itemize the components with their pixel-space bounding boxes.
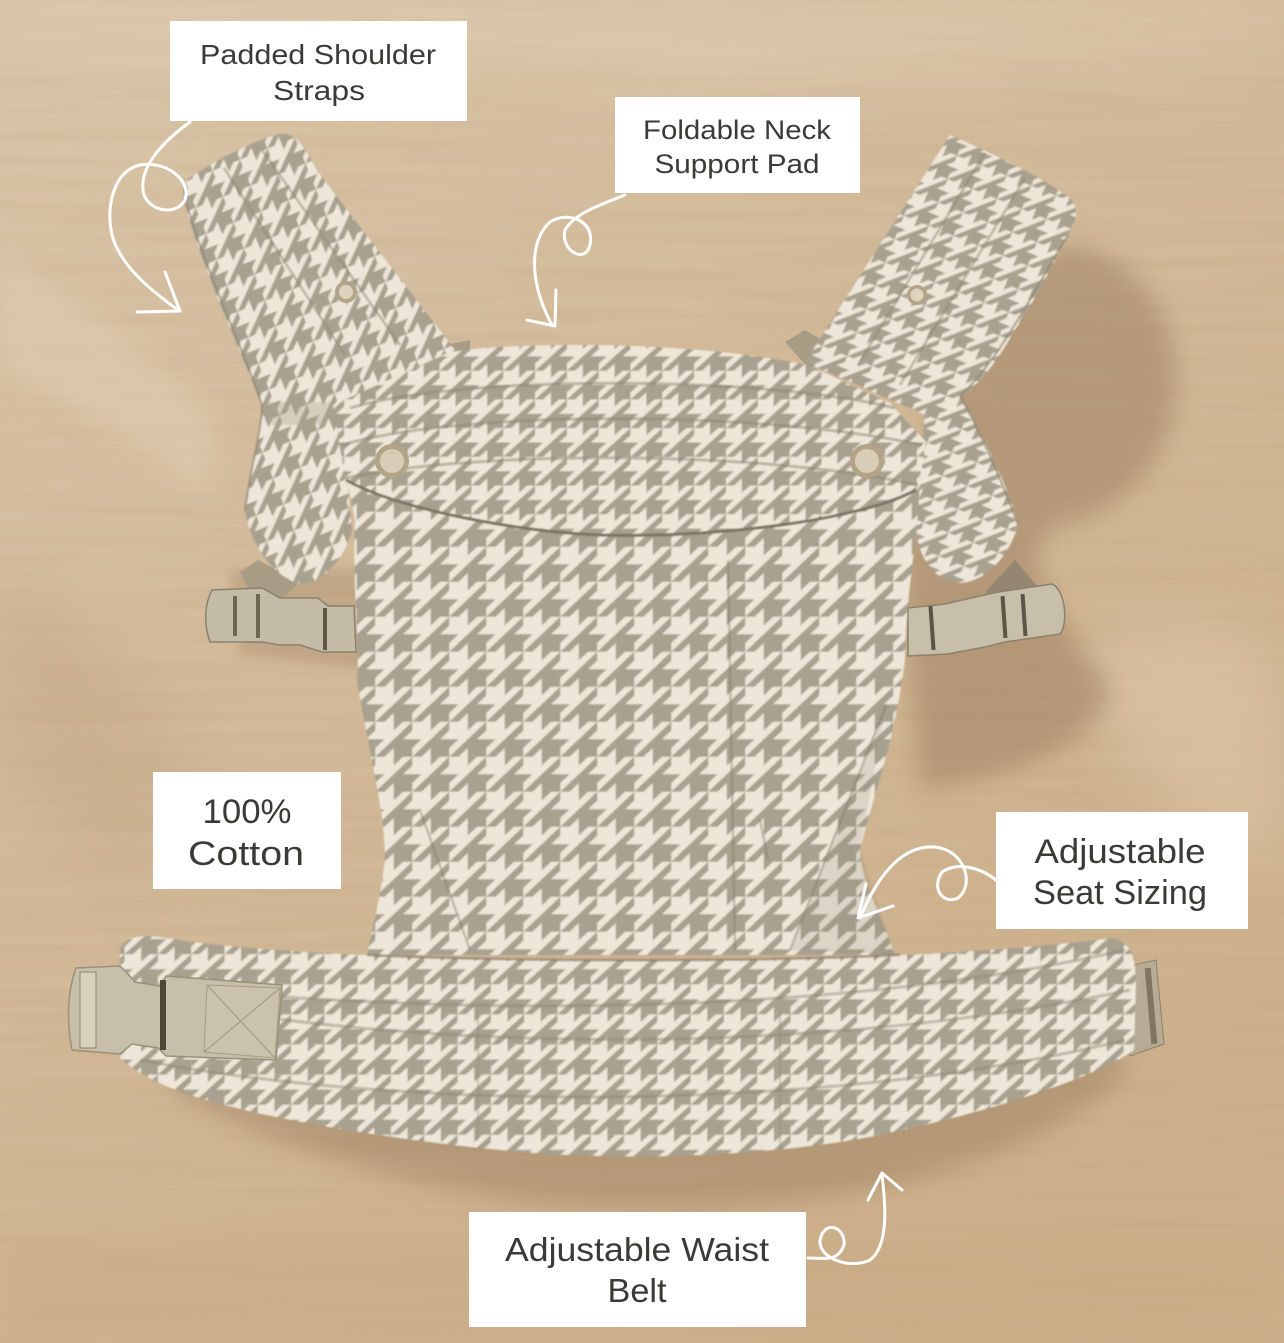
callout: 100% cotton: 100% [202, 793, 292, 831]
strap snap left [335, 281, 357, 303]
callout: adjustable seat sizing: Adjustable [1034, 833, 1206, 871]
arrow: adjustable seat sizing [858, 847, 998, 918]
foldable neck pad [333, 345, 926, 535]
left chest buckle [206, 588, 356, 652]
strap snap right [907, 285, 927, 305]
right chest buckle [908, 584, 1065, 656]
callout: foldable neck support pad: Support Pad [654, 149, 820, 179]
callout: adjustable waist belt: Belt [608, 1272, 666, 1309]
arrow: adjustable waist belt [808, 1173, 902, 1264]
padded waist belt [120, 936, 1136, 1157]
callout: padded shoulder straps [170, 21, 467, 121]
callout: adjustable waist belt: Adjustable Waist [505, 1231, 769, 1268]
callout: adjustable seat sizing: Seat Sizing [1033, 874, 1207, 912]
right shoulder strap [805, 135, 1076, 583]
left waist buckle [69, 966, 282, 1060]
callout: padded shoulder straps: Padded Shoulder [200, 39, 436, 70]
arrow: foldable neck support pad [527, 195, 625, 326]
arrow: padded shoulder straps [110, 122, 190, 312]
callout: foldable neck support pad: Foldable Neck [643, 115, 832, 145]
right waist strap [1120, 960, 1164, 1056]
callout: 100% cotton [153, 772, 341, 889]
left shoulder strap [183, 134, 455, 584]
callout: padded shoulder straps: Straps [273, 75, 365, 106]
callout: adjustable waist belt [469, 1212, 806, 1327]
carrier shadow [170, 245, 1176, 1209]
callout: foldable neck support pad [615, 97, 860, 193]
callout: 100% cotton: Cotton [188, 835, 304, 873]
main body panel [345, 470, 920, 955]
chest strap webbing [240, 330, 1040, 600]
neck pad snap right [850, 444, 884, 478]
callout: adjustable seat sizing [996, 812, 1248, 929]
neck pad snap left [375, 444, 409, 478]
